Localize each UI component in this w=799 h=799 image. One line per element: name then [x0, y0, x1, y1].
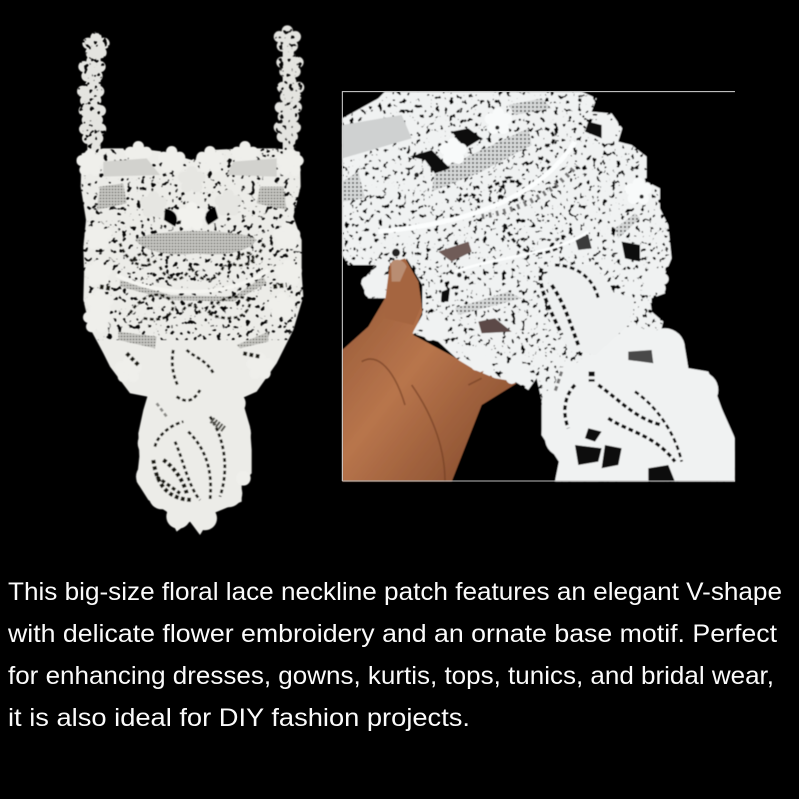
centre flower and cut-outs — [140, 166, 242, 230]
panel: close-up photo of lace held in hand — [342, 92, 735, 482]
scalloped edge flowers — [76, 141, 304, 486]
close-up secondary stem — [455, 232, 588, 272]
lace body with cut-outs — [80, 148, 304, 341]
close-up curved band — [378, 142, 575, 232]
description text — [7, 578, 782, 732]
close-up lower edge scallops — [361, 114, 669, 384]
photo background — [342, 92, 735, 482]
description text: for enhancing dresses, gowns, kurtis, tops, tunics, and bridal wear, — [8, 662, 774, 690]
close-up cut-outs — [410, 122, 675, 482]
mesh panels — [97, 158, 287, 348]
scallop cut-out dashes — [100, 243, 287, 500]
close-up solid rose petals — [542, 325, 735, 482]
description text: it is also ideal for DIY fashion projects. — [8, 704, 470, 732]
close-up flowers — [392, 108, 652, 277]
hand palm and fingers — [342, 258, 517, 482]
thumbnail — [391, 260, 407, 282]
thumb — [385, 258, 422, 325]
lower lace tail — [96, 339, 289, 536]
palm crease lines — [362, 359, 482, 482]
description text: with delicate flower embroidery and an ornate base motif. Perfect — [7, 620, 777, 648]
close-up ladder stitching — [482, 165, 577, 217]
lace raised band — [117, 270, 268, 292]
close-up mesh panels — [342, 98, 653, 363]
frame bottom — [342, 479, 735, 482]
close-up upper rose — [548, 265, 635, 355]
right strap — [274, 25, 304, 153]
tail scallop lobes — [136, 393, 251, 530]
description text: This big-size floral lace neckline patch features an elegant V-shape — [8, 578, 782, 606]
photo frame — [342, 92, 735, 481]
close-up petal lobes — [542, 328, 732, 464]
close-up dashed stitching — [458, 128, 682, 462]
left strap — [77, 32, 110, 153]
panel: full lace neckline patch photo — [76, 25, 304, 535]
close-up lace with cut-outs — [342, 92, 735, 482]
